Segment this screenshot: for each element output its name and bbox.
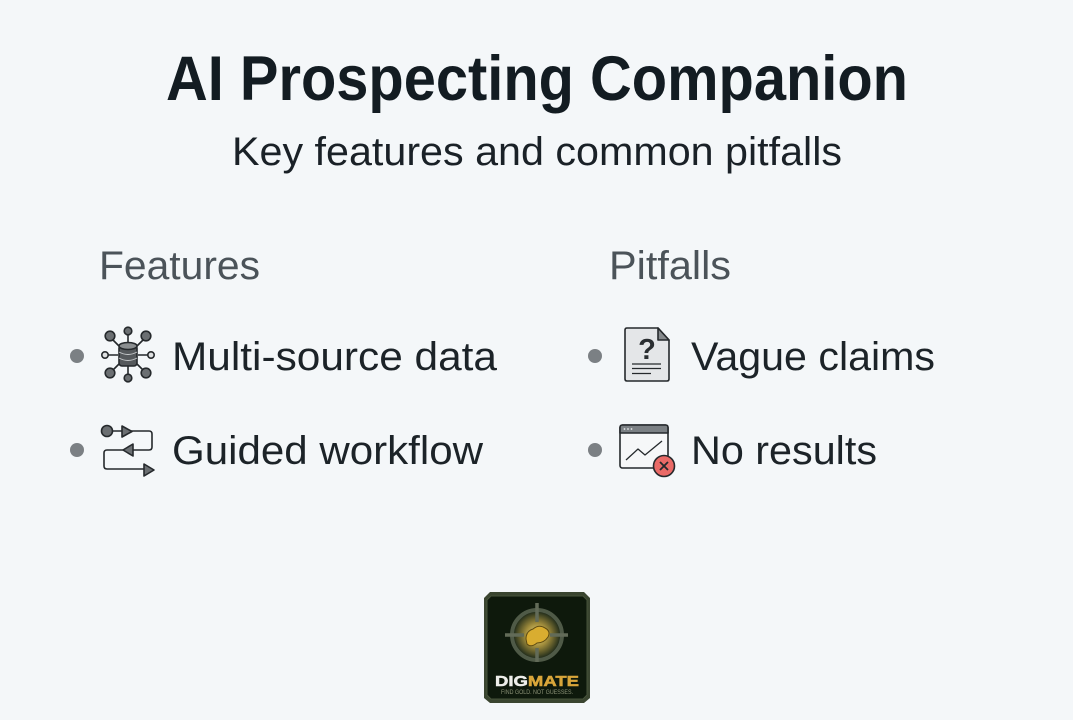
list item: guided workflow [70, 426, 483, 476]
panel: features [70, 244, 498, 476]
list item: multi-source data [70, 327, 498, 382]
list item: vague claims [588, 328, 935, 381]
logo wordmark: DIG MATE [495, 673, 579, 690]
icon: chart window with error badge [620, 425, 674, 476]
heading: features: Features [99, 244, 260, 288]
label: Vague claims [691, 335, 935, 379]
title: AI Prospecting Companion [166, 44, 908, 114]
logo: Digmate badge [484, 592, 590, 703]
icon: crosshair with gold nugget [505, 603, 568, 662]
bullet [70, 443, 84, 457]
logo tagline: FIND GOLD. NOT GUESSES. [501, 690, 573, 696]
icon: document with question mark: ? [638, 334, 656, 366]
list item: no results [588, 425, 877, 476]
panel: pitfalls [588, 244, 935, 476]
bullet [588, 443, 602, 457]
label: Multi-source data [172, 335, 498, 379]
bullet [70, 349, 84, 363]
icon: workflow arrows [102, 426, 154, 476]
icon: database network [102, 327, 154, 382]
subtitle: Key features and common pitfalls [232, 130, 842, 174]
label: No results [691, 429, 877, 473]
label: Guided workflow [172, 429, 483, 473]
bullet [588, 349, 602, 363]
icon: document with question mark [625, 328, 669, 381]
heading: pitfalls: Pitfalls [609, 244, 731, 288]
